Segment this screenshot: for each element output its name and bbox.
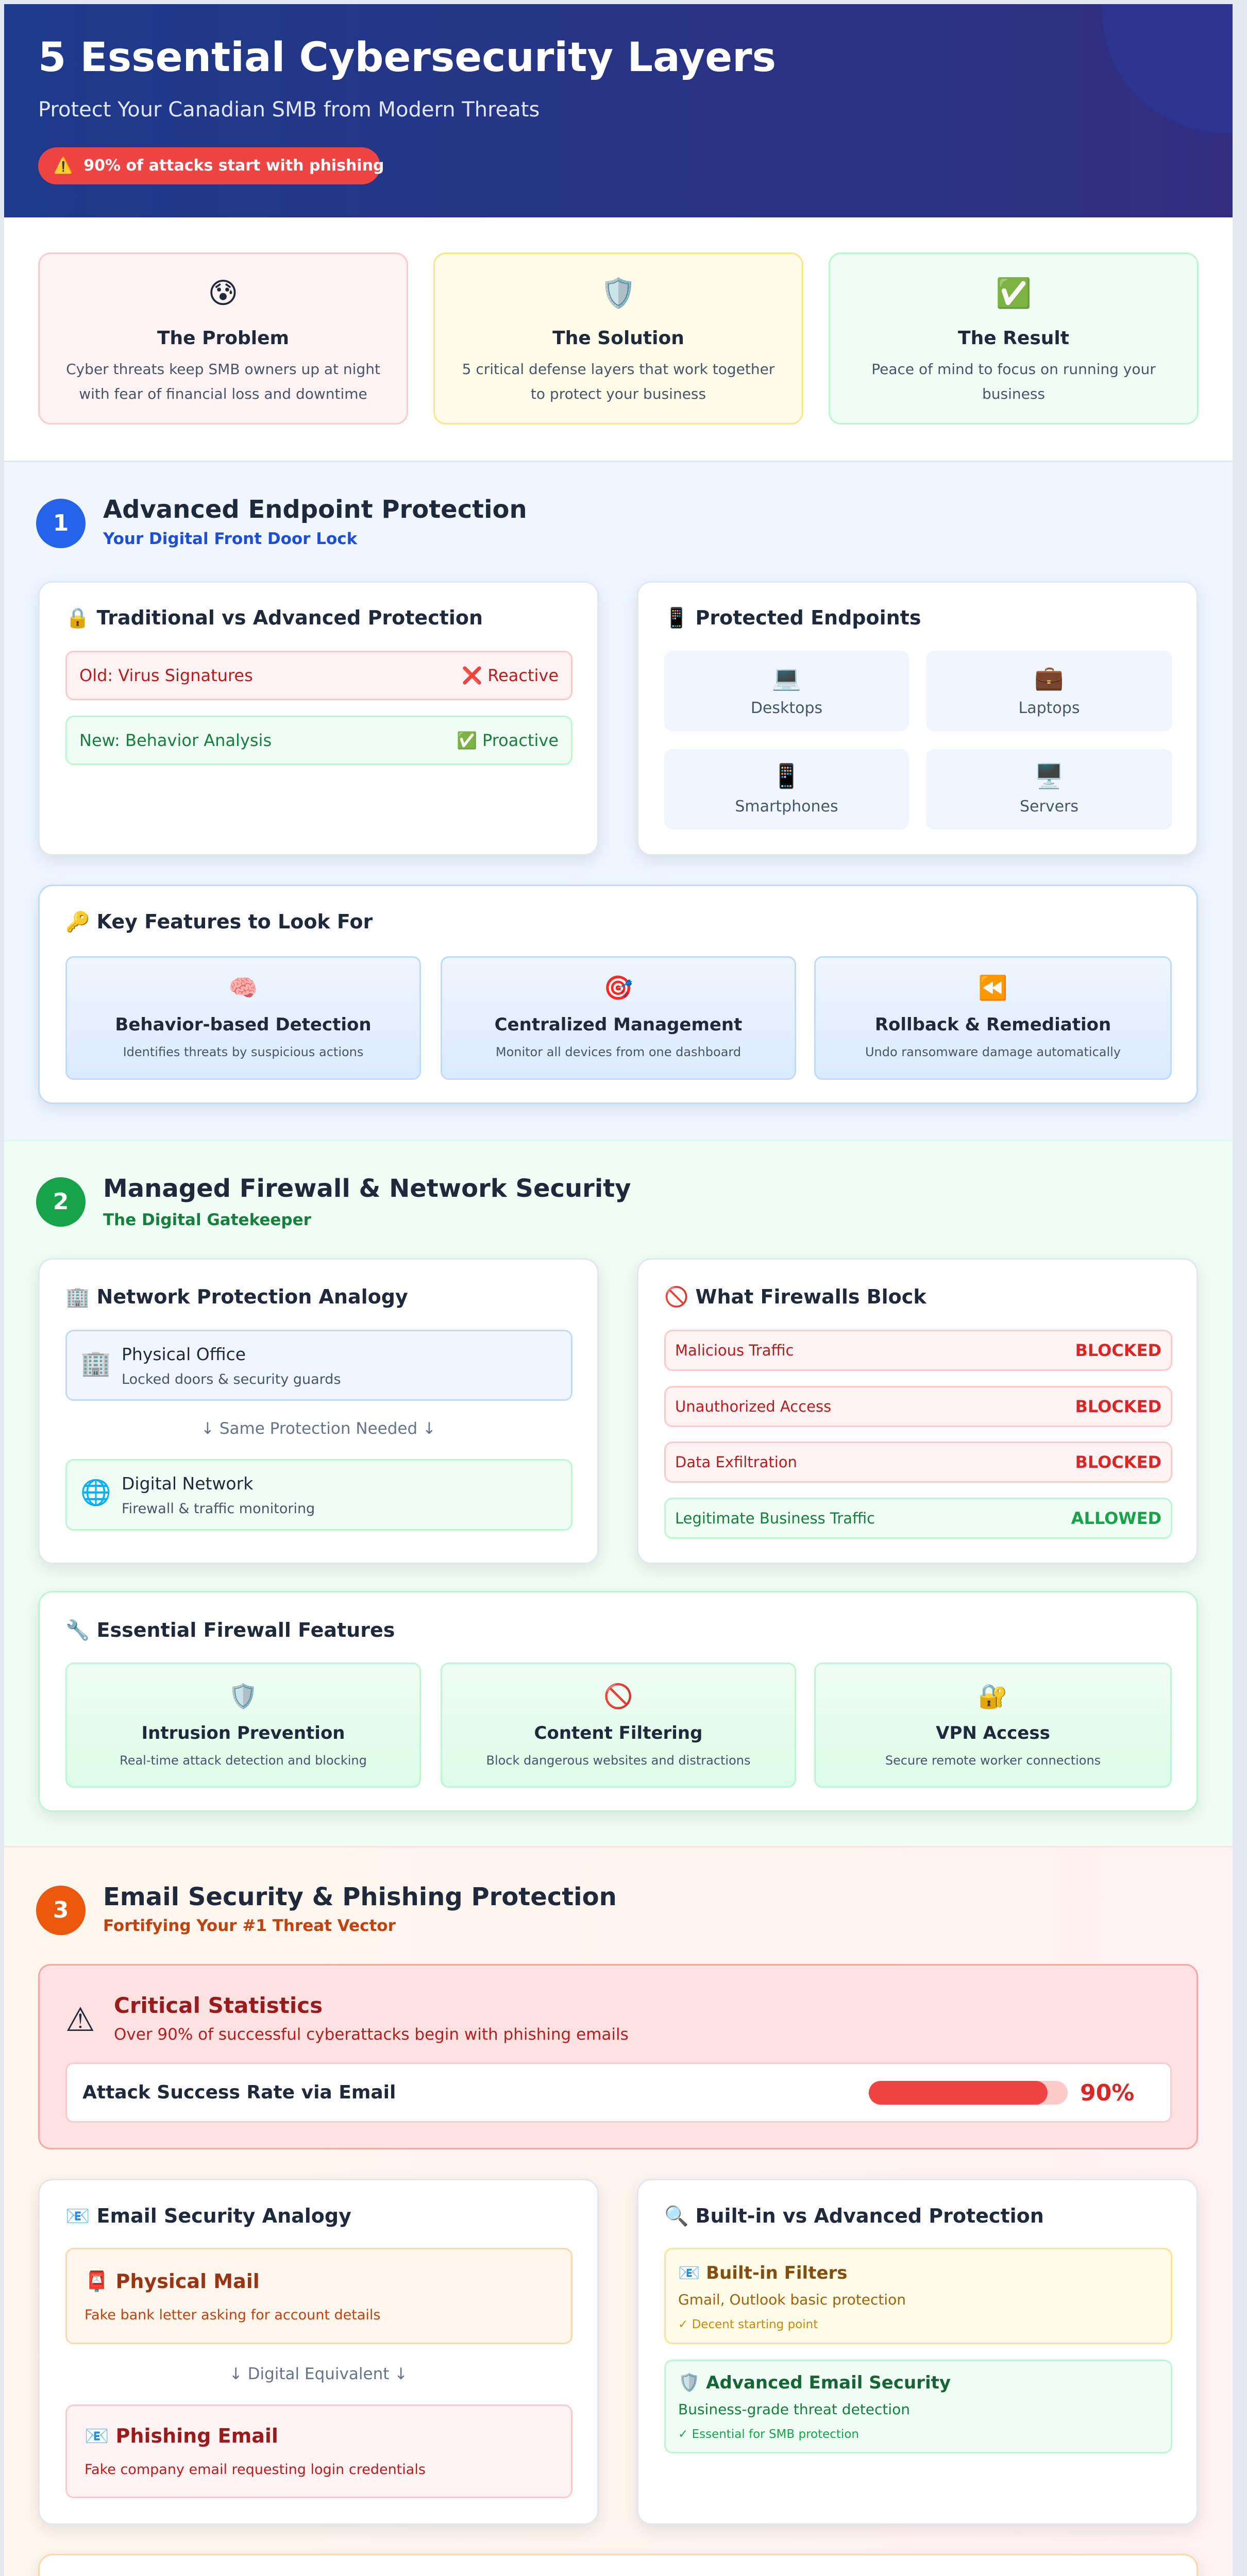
critical statistics — [38, 1964, 1198, 2149]
section 1: endpoint — [4, 461, 1233, 1140]
card: built-in vs advanced: 📧 Built-in Filters — [678, 2263, 848, 2283]
card: what firewalls block: Data Exfiltration — [675, 1453, 797, 1471]
card: protected endpoints: 💻 — [772, 664, 801, 691]
card: key features: ⏪ — [978, 974, 1008, 1002]
card: key features: Rollback & Remediation — [875, 1014, 1111, 1035]
card: what firewalls block: Unauthorized Access — [675, 1398, 831, 1415]
card: firewall features: Intrusion Prevention — [141, 1723, 345, 1743]
card: solution: 🛡️ — [600, 277, 636, 310]
card: email analogy: 📧 Email Security Analogy — [65, 2205, 351, 2227]
card: problem: The Problem — [157, 328, 289, 349]
card: problem: Cyber threats keep SMB owners up at night with fear of financial loss and downtime — [66, 361, 380, 402]
card: result: ✅ — [996, 277, 1032, 310]
critical statistics: Critical Statistics — [114, 1993, 323, 2018]
card: firewall features: 🔐 — [978, 1682, 1008, 1710]
card: what firewalls block: ALLOWED — [1071, 1509, 1161, 1528]
card: key features — [38, 885, 1198, 1104]
card: problem — [38, 252, 408, 425]
card: email analogy: Fake company email requesting login credentials — [85, 2462, 426, 2478]
intro cards — [38, 252, 1199, 425]
card: protected endpoints: 💼 — [1034, 664, 1064, 691]
section subtitle: Your Digital Front Door Lock — [103, 530, 357, 548]
card: network analogy — [38, 1258, 599, 1564]
card: built-in vs advanced: Gmail, Outlook basic protection — [678, 2291, 906, 2308]
card: result: Peace of mind to focus on running your business — [871, 361, 1156, 402]
card: traditional vs advanced: New: Behavior Analysis — [79, 731, 272, 750]
card: key features: Identifies threats by suspicious actions — [123, 1045, 363, 1059]
card: network analogy: Firewall & traffic monitoring — [122, 1501, 315, 1517]
card: what firewalls block: 🚫 What Firewalls Block — [664, 1285, 926, 1308]
card: email features — [38, 2554, 1198, 2576]
badge — [38, 147, 380, 184]
number badge 1 — [36, 499, 86, 548]
section 2: firewall — [4, 1140, 1233, 1846]
card: email analogy: 📮 Physical Mail — [85, 2270, 260, 2293]
section title: Advanced Endpoint Protection — [103, 495, 527, 524]
card: email analogy — [38, 2179, 599, 2525]
card: solution — [433, 252, 803, 425]
card: built-in vs advanced: ✓ Decent starting point — [678, 2318, 818, 2331]
number badge 1: 1 — [53, 510, 69, 536]
number badge 2: 2 — [53, 1189, 69, 1215]
card: firewall features: VPN Access — [936, 1723, 1050, 1743]
section 3: email — [4, 1846, 1233, 2576]
card: traditional vs advanced: ✅ Proactive — [457, 731, 559, 750]
card: built-in vs advanced: 🛡️ Advanced Email Security — [678, 2372, 951, 2393]
critical statistics: Over 90% of successful cyberattacks begin with phishing emails — [114, 2025, 629, 2044]
section title: Managed Firewall & Network Security — [103, 1174, 631, 1203]
card: firewall features: 🛡️ — [228, 1682, 258, 1710]
number badge 3 — [36, 1886, 86, 1935]
card: network analogy: Physical Office — [122, 1344, 246, 1364]
card: what firewalls block: BLOCKED — [1075, 1341, 1161, 1360]
card: key features: 🎯 — [603, 974, 633, 1002]
card: what firewalls block: BLOCKED — [1075, 1397, 1161, 1416]
card: what firewalls block: Malicious Traffic — [675, 1342, 794, 1359]
section title: Email Security & Phishing Protection — [103, 1883, 617, 1911]
card: key features: Undo ransomware damage automatically — [865, 1045, 1121, 1059]
section subtitle: Fortifying Your #1 Threat Vector — [103, 1917, 396, 1935]
card: protected endpoints: Smartphones — [735, 798, 838, 816]
card: built-in vs advanced — [637, 2179, 1198, 2525]
card: protected endpoints — [637, 581, 1198, 856]
card: solution: 5 critical defense layers that work together to protect your business — [462, 361, 774, 402]
attack rate bar: 90% — [1080, 2080, 1134, 2106]
card: firewall features: Content Filtering — [534, 1723, 702, 1743]
card: key features: 🔑 Key Features to Look For — [65, 910, 373, 933]
card: traditional vs advanced: 🔒 Traditional vs Advanced Protection — [65, 606, 483, 629]
card: solution: The Solution — [552, 328, 684, 349]
decorative circle — [1102, 0, 1247, 133]
subtitle: Protect Your Canadian SMB from Modern Threats — [38, 98, 540, 122]
card: protected endpoints: Desktops — [751, 699, 822, 717]
card: network analogy: 🏢 Network Protection Analogy — [65, 1285, 408, 1308]
card: problem: 😰 — [208, 277, 238, 310]
card: network analogy: Locked doors & security guards — [122, 1371, 341, 1387]
header — [4, 4, 1233, 217]
card: what firewalls block — [637, 1258, 1198, 1564]
card: key features: 🧠 — [228, 974, 258, 1002]
title: 5 Essential Cybersecurity Layers — [38, 35, 776, 81]
card: firewall features — [38, 1591, 1198, 1812]
card: protected endpoints: 📱 Protected Endpoints — [664, 606, 921, 629]
section subtitle: The Digital Gatekeeper — [103, 1211, 311, 1229]
card: firewall features: 🔧 Essential Firewall Features — [65, 1619, 395, 1641]
card: result — [829, 252, 1199, 425]
card: firewall features: 🚫 — [603, 1682, 633, 1710]
card: key features: Behavior-based Detection — [115, 1014, 372, 1035]
card: traditional vs advanced: ❌ Reactive — [462, 666, 559, 685]
card: result: The Result — [958, 328, 1069, 349]
card: built-in vs advanced: ✓ Essential for SMB protection — [678, 2428, 859, 2441]
badge: ⚠️ 90% of attacks start with phishing — [54, 157, 384, 175]
card: network analogy: ↓ Same Protection Needed ↓ — [201, 1419, 436, 1438]
card: protected endpoints: Servers — [1020, 798, 1079, 816]
card: email analogy: ↓ Digital Equivalent ↓ — [229, 2365, 408, 2383]
card: built-in vs advanced: 🔍 Built-in vs Advanced Protection — [664, 2205, 1044, 2227]
card: network analogy: Digital Network — [122, 1473, 253, 1494]
card: email analogy: Fake bank letter asking for account details — [85, 2307, 380, 2323]
card: firewall features: Secure remote worker connections — [885, 1753, 1101, 1768]
card: protected endpoints: Laptops — [1019, 699, 1080, 717]
card: traditional vs advanced — [38, 581, 599, 856]
card: what firewalls block: Legitimate Business Traffic — [675, 1510, 875, 1527]
critical statistics: ⚠ — [65, 2001, 95, 2039]
attack rate bar — [65, 2062, 1172, 2123]
card: protected endpoints: 📱 — [772, 762, 801, 790]
card: key features: Monitor all devices from one dashboard — [496, 1045, 741, 1059]
card: traditional vs advanced: Old: Virus Signatures — [79, 666, 253, 685]
card: what firewalls block: BLOCKED — [1075, 1452, 1161, 1472]
card: firewall features: Block dangerous websites and distractions — [486, 1753, 750, 1768]
card: key features: Centralized Management — [495, 1014, 742, 1035]
number badge 3: 3 — [53, 1897, 69, 1923]
card: built-in vs advanced: Business-grade threat detection — [678, 2401, 910, 2418]
card: network analogy: 🌐 — [80, 1478, 111, 1507]
number badge 2 — [36, 1177, 86, 1227]
card: firewall features: Real-time attack detection and blocking — [120, 1753, 367, 1768]
card: protected endpoints: 🖥️ — [1034, 762, 1064, 790]
card: email analogy: 📧 Phishing Email — [85, 2425, 278, 2447]
card: network analogy: 🏢 — [80, 1349, 111, 1378]
attack rate bar: Attack Success Rate via Email — [82, 2082, 396, 2103]
